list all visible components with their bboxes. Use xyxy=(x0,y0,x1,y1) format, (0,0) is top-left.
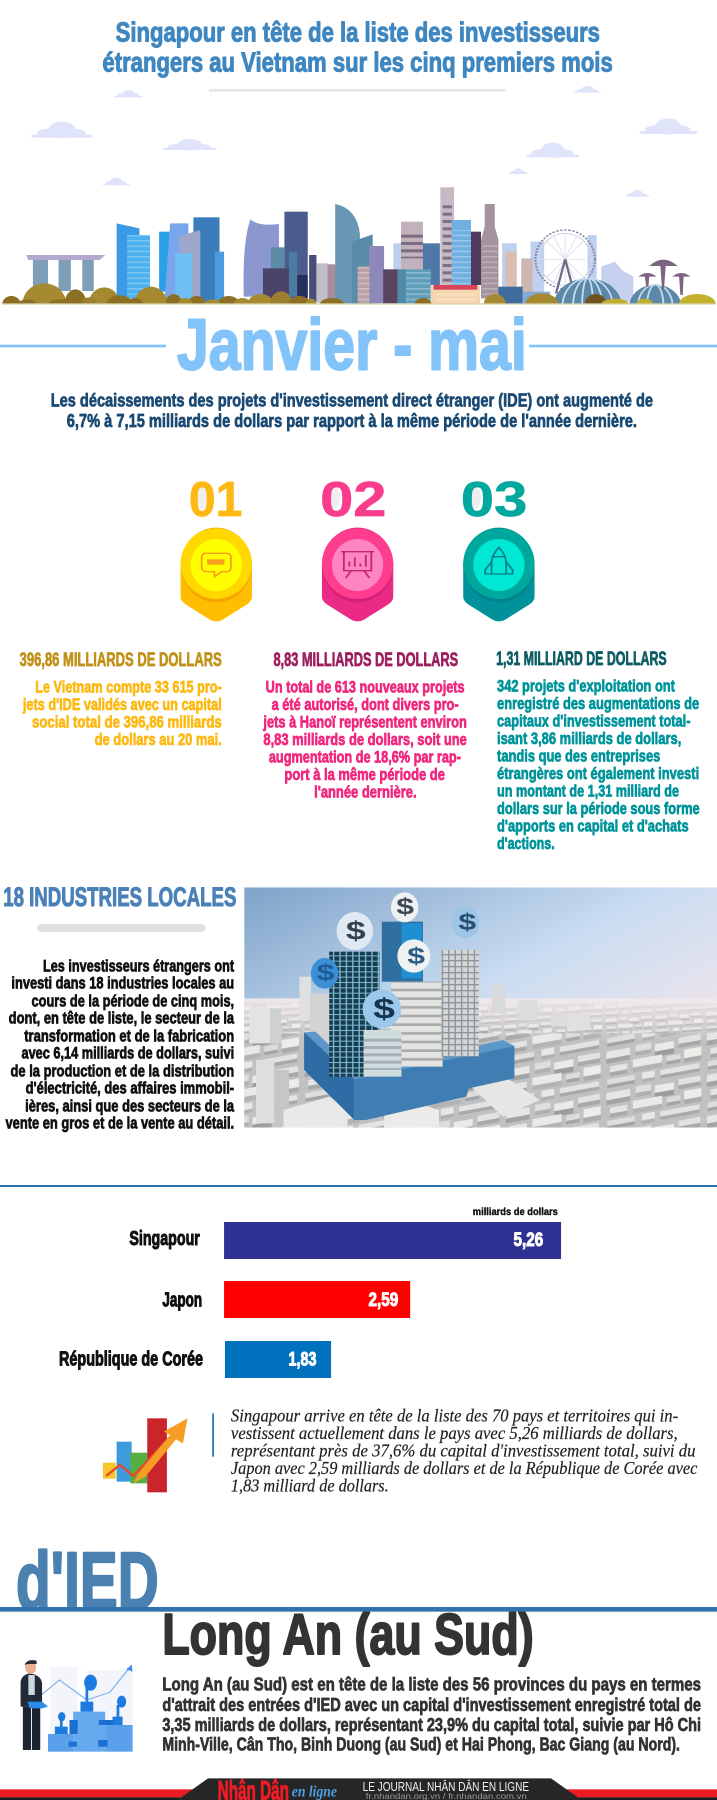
footer banner xyxy=(0,1775,717,1800)
icon: teal pin with rocket xyxy=(463,528,535,621)
text block xyxy=(5,958,235,1133)
towers xyxy=(329,922,479,1077)
text block: investi dans 18 industries locales au xyxy=(11,975,234,993)
bar: Singapour xyxy=(129,1222,561,1259)
coins: $ xyxy=(407,943,425,969)
bar: Japon: 2,59 xyxy=(369,1289,398,1310)
number 01: 01 xyxy=(189,471,242,527)
panel: bar chart by country xyxy=(59,1206,698,1496)
footer banner: LE JOURNAL NHÂN DÂN EN LIGNE xyxy=(363,1780,529,1794)
text block: vente en gros et de la vente au détail. xyxy=(5,1115,234,1133)
panel: three key figures xyxy=(20,471,700,853)
text: jets d'IDE validés avec un capital xyxy=(22,696,222,714)
text block xyxy=(162,1674,701,1755)
number 03: 03 xyxy=(461,471,527,527)
text xyxy=(22,679,222,749)
bar: République de Corée: République de Corée xyxy=(59,1348,203,1371)
bar: République de Corée: 1,83 xyxy=(289,1348,316,1370)
coins: $ xyxy=(458,909,477,935)
illustration: city with dollar coins xyxy=(244,887,717,1128)
clouds xyxy=(31,86,697,197)
text block: dont, en tête de liste, le secteur de la xyxy=(9,1010,235,1028)
text: port à la même période de xyxy=(284,766,445,784)
bar: Singapour: 5,26 xyxy=(514,1229,543,1250)
text: d'actions. xyxy=(497,835,555,853)
text: l'année dernière. xyxy=(314,784,417,802)
text: augmentation de 18,6% par rap- xyxy=(269,749,461,767)
divider xyxy=(0,1185,717,1187)
text block: de la production et de la distribution xyxy=(11,1063,234,1081)
bar: Singapour: Singapour xyxy=(129,1228,200,1250)
text: 8,83 milliards de dollars, soit une xyxy=(263,731,467,749)
illustration: businessman watering coin stacks xyxy=(21,1660,133,1752)
title xyxy=(102,17,613,77)
text: de dollars au 20 mai. xyxy=(95,731,222,749)
column 2: 8,83 MILLIARDS DE DOLLARS xyxy=(273,649,458,670)
text block: cours de la période de cinq mois, xyxy=(32,993,234,1011)
text xyxy=(263,679,467,802)
ferris wheel xyxy=(535,230,595,293)
coins: $ xyxy=(317,960,335,986)
text block: avec 6,14 milliards de dollars, suivi xyxy=(21,1045,234,1063)
text: social total de 396,86 milliards xyxy=(32,714,222,732)
column 2 xyxy=(263,471,467,802)
intro text xyxy=(51,390,653,431)
bar: Japon: Japon xyxy=(162,1289,202,1312)
text block xyxy=(231,1406,698,1496)
column 1: 396,86 MILLIARDS DE DOLLARS xyxy=(20,649,222,670)
panel: 18 local industries xyxy=(0,882,717,1187)
illustration: city skyline xyxy=(2,187,716,305)
text: Un total de 613 nouveaux projets xyxy=(266,679,465,697)
coins: $ xyxy=(396,894,415,920)
text block: ières, ainsi que des secteurs de la xyxy=(25,1098,235,1116)
panel: header and skyline xyxy=(0,17,717,431)
number 02: 02 xyxy=(320,471,386,527)
unit label: milliards de dollars xyxy=(473,1206,558,1217)
text block: 1,83 milliard de dollars. xyxy=(231,1476,389,1496)
text block: Les investisseurs étrangers ont xyxy=(43,958,234,976)
text: a été autorisé, dont divers pro- xyxy=(272,696,459,714)
panel: Long An province xyxy=(0,1535,717,1800)
icon: rising chart xyxy=(103,1418,187,1492)
footer banner: en ligne xyxy=(292,1783,337,1800)
text block: transformation et de la fabrication xyxy=(24,1027,234,1045)
bar: République de Corée xyxy=(59,1341,331,1378)
column 3 xyxy=(461,471,700,853)
heading: 18 INDUSTRIES LOCALES xyxy=(3,882,236,912)
coins: $ xyxy=(373,994,395,1025)
bar chart xyxy=(59,1206,561,1378)
blue basin xyxy=(304,1032,514,1120)
column 1 xyxy=(20,471,252,749)
trees xyxy=(2,283,716,304)
bar: Japon xyxy=(162,1281,410,1318)
coins: $ xyxy=(346,916,366,945)
icon: yellow pin with speech bubble xyxy=(181,528,252,621)
icon: pink pin with presentation board xyxy=(322,528,393,621)
text: jets à Hanoï représentent environ xyxy=(263,714,467,732)
big label d'IED: d'IED xyxy=(16,1535,159,1626)
text xyxy=(497,678,700,853)
supertrees xyxy=(638,260,690,295)
coins xyxy=(311,892,479,1028)
text: Le Vietnam compte 33 615 pro- xyxy=(35,679,222,697)
text block: d'électricité, des affaires immobil- xyxy=(26,1080,234,1098)
